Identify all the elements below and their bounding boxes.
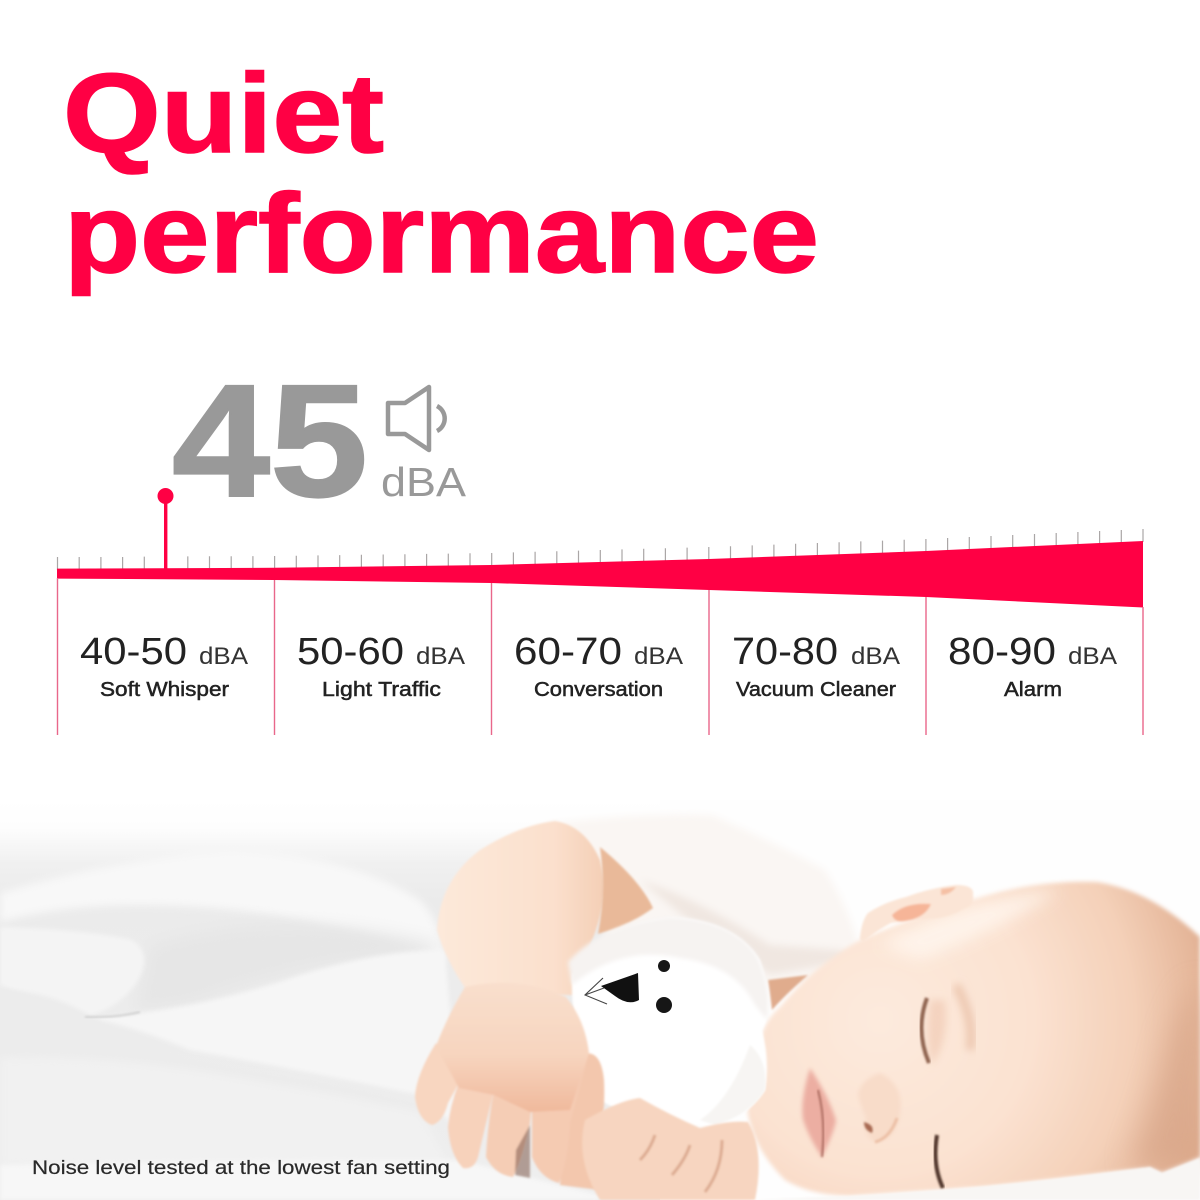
armpit shadow [598, 847, 653, 934]
range: 40-50 dBA [80, 631, 248, 701]
range: 50-60 dBA: Light Traffic [322, 679, 441, 701]
range: 70-80 dBA: 70-80 [732, 631, 838, 673]
range: 40-50 dBA: dBA [199, 643, 248, 670]
neck shadow [768, 975, 808, 1010]
back of hand [436, 983, 589, 1112]
teddy eyes [658, 960, 670, 972]
illustration: sleeping baby with teddy [0, 800, 1200, 1200]
range: 50-60 dBA: dBA [416, 643, 465, 670]
teddy arm [700, 1045, 765, 1125]
nose [858, 1073, 901, 1142]
bed sheet [750, 1158, 1200, 1200]
teddy nose [601, 973, 639, 1002]
range: 40-50 dBA: 40-50 [80, 631, 187, 673]
range: 60-70 dBA: 60-70 [514, 631, 622, 673]
footnote: Noise level tested at the lowest fan setting [32, 1157, 450, 1179]
range: 50-60 dBA [297, 631, 465, 701]
range: 80-90 dBA: dBA [1068, 643, 1117, 670]
range: 60-70 dBA [514, 631, 683, 701]
closed eye upper [921, 985, 971, 1065]
baby hand on blanket [415, 983, 604, 1190]
range: 50-60 dBA: 50-60 [297, 631, 404, 673]
range: 80-90 dBA [948, 631, 1117, 701]
title: Quiet [63, 51, 384, 176]
range dividers [58, 578, 1143, 735]
baby second hand [582, 1098, 759, 1200]
white background behind head [660, 800, 1200, 1200]
big number 45: 45 [172, 351, 368, 530]
teddy hood [568, 917, 768, 1020]
teddy bear [568, 917, 768, 1125]
range: 70-80 dBA [732, 631, 900, 701]
teddy body [572, 917, 768, 1125]
second hand thumb [560, 1053, 604, 1190]
noise level readout [172, 351, 467, 530]
baby head [748, 882, 1200, 1196]
range: 70-80 dBA: dBA [851, 643, 900, 670]
teddy stitch [585, 978, 607, 1004]
title [63, 51, 819, 296]
icon: speaker [388, 387, 445, 450]
baby arm [437, 821, 603, 995]
ear [860, 885, 973, 941]
fingers [415, 1043, 459, 1125]
closed eye lower [935, 1135, 943, 1188]
ruler ticks [58, 529, 1143, 570]
range: 80-90 dBA: 80-90 [948, 631, 1056, 673]
range: 40-50 dBA: Soft Whisper [100, 679, 229, 701]
onesie [545, 814, 860, 985]
range: 80-90 dBA: Alarm [1004, 679, 1062, 701]
hair shade [1130, 980, 1200, 1172]
lips [802, 1068, 836, 1157]
unit dBA: dBA [381, 459, 467, 505]
title: performance [64, 171, 819, 296]
range: 60-70 dBA: Conversation [534, 679, 663, 701]
range: 70-80 dBA: Vacuum Cleaner [736, 679, 896, 701]
range: 60-70 dBA: dBA [634, 643, 683, 670]
marker pin at 45 dBA [158, 488, 174, 570]
blanket [0, 800, 660, 1200]
forehead highlight [880, 890, 1060, 960]
wedge volume bar [57, 541, 1143, 608]
